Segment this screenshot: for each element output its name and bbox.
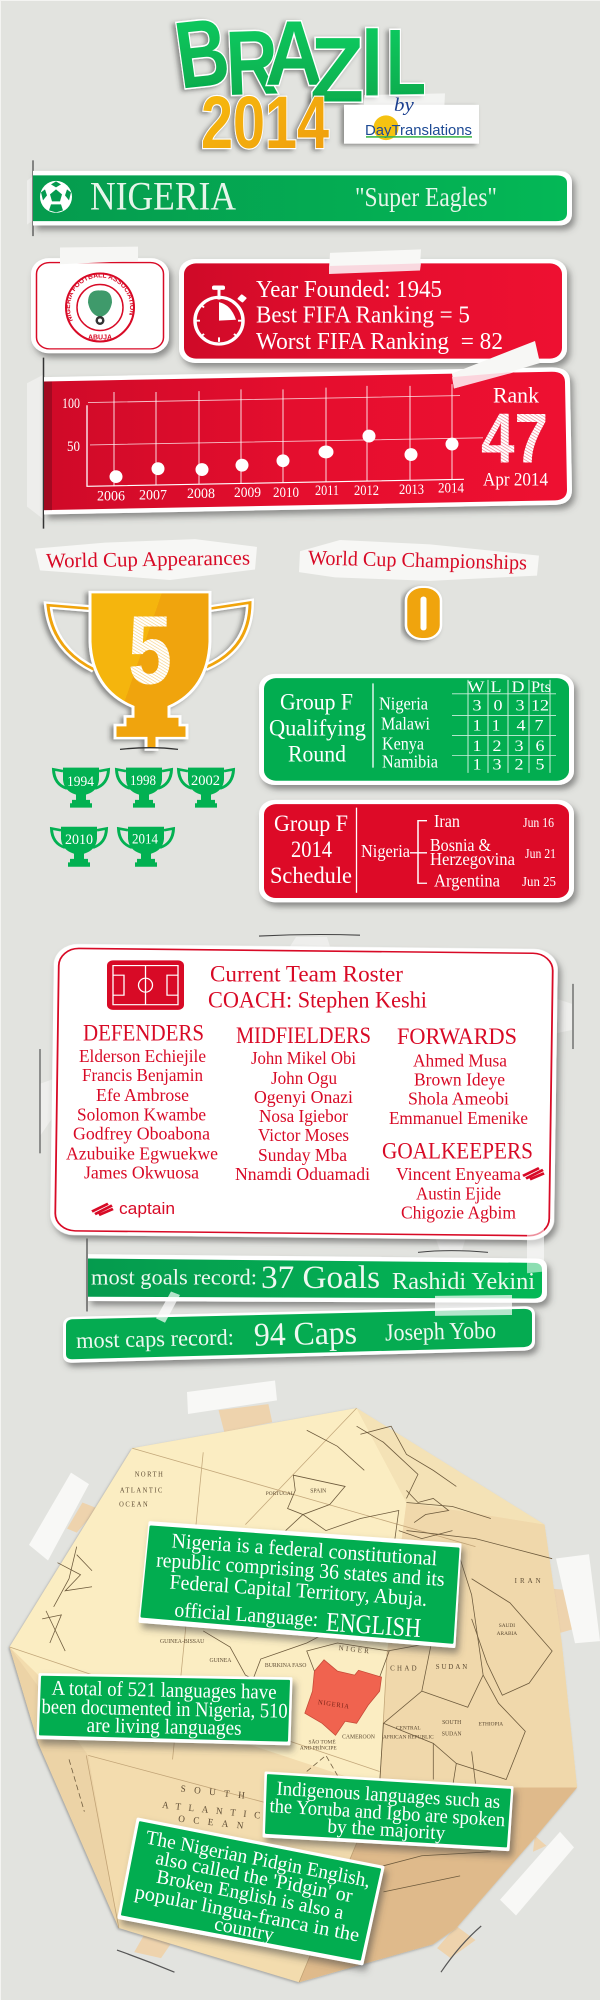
- map place labels: SUDAN: [436, 1663, 469, 1671]
- list: goalkeepers: Vincent Enyeama: [396, 1164, 521, 1185]
- chart axis labels: 100: [62, 396, 80, 412]
- icon: trophy with 5 appearances: [48, 592, 250, 749]
- table values: Pts: [531, 678, 551, 696]
- table values: 2: [514, 755, 524, 773]
- globe tabs: [67, 1404, 581, 1958]
- globe body: [10, 1408, 577, 1982]
- callout: federal republic: Nigeria is a federal constitutional: [171, 1530, 438, 1570]
- map place labels: ETHIOPIA: [478, 1721, 503, 1727]
- text: panel title: [269, 689, 366, 767]
- map place labels: ATLANTIC: [162, 1801, 268, 1822]
- text: panel title: Qualifying: [269, 715, 366, 741]
- list: forwards: FORWARDS: [397, 1023, 517, 1049]
- list: midfielders: Ogenyi Onazi: [254, 1087, 353, 1108]
- text: panel title: Group F: [274, 811, 348, 837]
- list: forwards: Ahmed Musa: [413, 1051, 507, 1071]
- callout: federal republic: Federal Capital Territory, Abuja.: [169, 1571, 428, 1611]
- table values: 3: [492, 755, 502, 773]
- fixtures: Iran: [434, 812, 461, 831]
- table values: D: [511, 678, 525, 696]
- icon: championships 0: [406, 587, 441, 639]
- text: rank 47: 47: [481, 399, 548, 477]
- text: panel title: [270, 811, 352, 889]
- text: caps record: most caps record:: [76, 1325, 234, 1354]
- text: panel title: Group F: [280, 689, 353, 715]
- list: goalkeepers: [382, 1138, 544, 1223]
- callout: indigenous languages: the Yoruba and Igbo are spoken: [269, 1796, 506, 1831]
- text: 5: 5: [128, 596, 172, 705]
- callout: 521 languages: are living languages: [86, 1715, 242, 1740]
- chart axis labels: 2011: [315, 483, 339, 499]
- heading: BRAZIL: A: [265, 1, 323, 104]
- list: defenders: Francis Benjamin: [82, 1065, 203, 1086]
- table values: 6: [535, 737, 545, 755]
- list: midfielders: Victor Moses: [258, 1125, 349, 1146]
- title: Brazil 2014: [169, 0, 426, 164]
- table values: 3: [514, 737, 524, 755]
- chart axis labels: 2008: [187, 486, 215, 502]
- logo: by DayTranslations: by: [394, 95, 414, 116]
- banner: most goals record: [87, 1238, 547, 1311]
- icon: mini trophy 2002: [178, 768, 234, 808]
- list: defenders: Godfrey Oboabona: [73, 1124, 210, 1144]
- list: midfielders: Nosa Igiebor: [259, 1106, 348, 1127]
- callout: Nigerian Pidgin English: also called the 'Pidgin' or: [154, 1848, 355, 1907]
- icon: mini trophy 1994: [54, 768, 108, 808]
- chart axis labels: 2014: [438, 480, 464, 496]
- fixtures: Nigeria: [361, 842, 411, 862]
- list: midfielders: John Mikel Obi: [251, 1048, 356, 1068]
- map place labels: NIGER: [338, 1644, 371, 1656]
- callout: indigenous languages: by the majority: [327, 1816, 446, 1845]
- callout: 521 languages: [38, 1675, 291, 1744]
- map lines: [10, 1408, 475, 1982]
- fixtures: Jun 21: [525, 847, 556, 862]
- chart axis labels: 50: [67, 439, 80, 455]
- team names: Malawi: [381, 715, 430, 734]
- heading: BRAZIL: [169, 0, 426, 121]
- fixtures: Herzegovina: [430, 850, 516, 870]
- table values: 4: [516, 716, 526, 734]
- callout: Nigerian Pidgin English: Broken English is also a: [155, 1866, 346, 1924]
- callout: Nigerian Pidgin English: popular lingua-franca in the: [133, 1882, 361, 1947]
- map place labels: GUINEA-BISSAU: [160, 1639, 205, 1645]
- text: panel title: 2014: [291, 837, 332, 863]
- text: panel title: Round: [288, 741, 346, 767]
- banner: most goals record: 37 Goals: [261, 1258, 380, 1295]
- callout: indigenous languages: [264, 1773, 512, 1850]
- chart data points: [110, 430, 458, 483]
- list: goalkeepers: GOALKEEPERS: [382, 1138, 533, 1164]
- map: paper globe: [10, 1404, 581, 1982]
- panel: Group F qualifying table: [259, 674, 574, 785]
- banner: most caps record: 94 Caps: [253, 1314, 357, 1353]
- chart axis labels: 2006: [97, 488, 125, 504]
- list: defenders: Solomon Kwambe: [77, 1105, 206, 1125]
- chart axis labels: [62, 396, 464, 504]
- callout: 521 languages: been documented in Nigeria, 510: [41, 1696, 288, 1723]
- map place labels: SUDAN: [442, 1731, 462, 1737]
- table values: 3: [515, 696, 525, 714]
- list: defenders: Elderson Echiejile: [79, 1046, 206, 1067]
- list: midfielders: John Ogu: [271, 1068, 337, 1088]
- list: defenders: James Okwuosa: [84, 1163, 199, 1183]
- icon: mini trophy 2014: 2014: [132, 831, 158, 847]
- chart axis labels: 2013: [399, 482, 424, 498]
- map place labels: CHAD: [390, 1664, 419, 1672]
- callout: federal republic: official Language:: [174, 1599, 319, 1631]
- list: defenders: Azubuike Egwuekwe: [66, 1144, 218, 1164]
- list: defenders: DEFENDERS: [83, 1020, 204, 1046]
- list: forwards: [389, 1023, 528, 1128]
- icon: football pitch: [107, 960, 184, 1010]
- map place labels: SOUTH: [180, 1784, 254, 1803]
- banner: most caps record: Joseph Yobo: [385, 1317, 496, 1346]
- map place labels: OCEAN: [119, 1501, 149, 1509]
- map place labels: [119, 1471, 544, 1833]
- banner: most goals record: Rashidi Yekini: [392, 1268, 535, 1294]
- table values: W: [468, 678, 485, 696]
- icon: mini trophy 1994: 1994: [67, 774, 94, 790]
- heading: BRAZIL: Z: [310, 18, 364, 121]
- heading: World Cup Appearances: World Cup Appearances: [46, 546, 250, 572]
- heading: World Cup Championships: World Cup Championships: [308, 546, 527, 574]
- heading: World Cup Championships: [299, 540, 539, 581]
- icon: mini trophy 2010: 2010: [65, 832, 93, 848]
- map place labels: SOUTH: [442, 1720, 462, 1726]
- table values: 3: [472, 696, 482, 714]
- bracket: [410, 821, 427, 883]
- map place labels: SPAIN: [310, 1488, 327, 1494]
- callout: Nigerian Pidgin English: country: [213, 1914, 276, 1946]
- list: goalkeepers: Chigozie Agbim: [401, 1203, 516, 1223]
- fixtures: Jun 16: [523, 816, 554, 830]
- list: forwards: Brown Ideye: [414, 1070, 505, 1090]
- table values: 1: [472, 755, 482, 773]
- legend: captain: captain: [119, 1199, 175, 1218]
- map place labels: BURKINA FASO: [265, 1663, 306, 1669]
- fixtures: Jun 25: [522, 875, 556, 890]
- logo: by DayTranslations: DayTranslations: [365, 122, 472, 139]
- callout: 521 languages: A total of 521 languages have: [51, 1677, 277, 1704]
- text: worst ranking: Worst FIFA Ranking = 82: [256, 327, 503, 354]
- map place labels: ARABIA: [497, 1631, 517, 1637]
- chart axis labels: 2009: [234, 485, 261, 501]
- map place labels: NORTH: [135, 1471, 164, 1478]
- text: year founded: Year Founded: 1945: [256, 275, 442, 303]
- fixtures: [361, 812, 556, 891]
- table values: [468, 678, 551, 773]
- list: forwards: Shola Ameobi: [408, 1089, 509, 1109]
- list: forwards: Emmanuel Emenike: [389, 1108, 528, 1128]
- heading: BRAZIL: I: [361, 7, 383, 118]
- table values: 1: [472, 716, 482, 734]
- fixtures: Argentina: [434, 872, 501, 891]
- text: Super Eagles: "Super Eagles": [355, 183, 497, 213]
- table values: 7: [534, 716, 544, 734]
- icon: Nigeria Football Association crest: ABUJA: [88, 334, 112, 341]
- text: roster heading: Current Team Roster: [210, 961, 404, 987]
- chart: rank by year: [87, 384, 483, 486]
- list: midfielders: Sunday Mba: [258, 1145, 347, 1166]
- map place labels: SAUDI: [499, 1623, 515, 1629]
- table values: 12: [531, 696, 549, 714]
- chart axis labels: 2012: [354, 483, 379, 499]
- fixtures: Bosnia &: [430, 836, 491, 856]
- map place labels: IRAN: [515, 1577, 544, 1585]
- icon: Nigeria highlighted: NIGERIA: [317, 1699, 350, 1711]
- text: roster heading: COACH: Stephen Keshi: [208, 987, 427, 1013]
- map place labels: CAMEROON: [342, 1734, 376, 1741]
- chart axis labels: 2010: [273, 485, 299, 501]
- text: NIGERIA: NIGERIA: [90, 174, 236, 219]
- team names: Kenya: [382, 735, 425, 754]
- list: midfielders: Nnamdi Oduamadi: [235, 1164, 370, 1185]
- heading: World Cup Appearances: [35, 539, 257, 580]
- list: goalkeepers: Austin Ejide: [416, 1184, 501, 1204]
- map place labels: AFRICAN REPUBLIC: [383, 1734, 434, 1741]
- map place labels: PORTUGAL: [266, 1491, 295, 1497]
- heading: 2014: 2014: [201, 81, 329, 164]
- heading: BRAZIL: L: [386, 11, 426, 115]
- table values: L: [490, 678, 502, 696]
- panel: founding and rankings: [179, 249, 567, 363]
- icon: stopwatch: [195, 285, 247, 344]
- panel: crest: [30, 246, 176, 362]
- callout: indigenous languages: Indigenous languages such as: [276, 1778, 501, 1813]
- table values: 2: [492, 737, 502, 755]
- text: Apr 2014: Apr 2014: [483, 470, 549, 490]
- list: midfielders: [235, 1023, 371, 1185]
- team names: [379, 695, 439, 772]
- icon: mini trophy 2014: [118, 827, 174, 867]
- team names: Nigeria: [379, 695, 429, 714]
- team names: Namibia: [382, 753, 439, 772]
- callout: Nigerian Pidgin English: The Nigerian Pidgin English,: [144, 1827, 372, 1892]
- table values: 0: [493, 696, 503, 714]
- text: panel title: Schedule: [270, 863, 352, 889]
- icon: mini trophy 2010: [52, 827, 106, 867]
- callout: federal republic: republic comprising 36 states and its: [155, 1549, 445, 1591]
- text: rank label: Rank: [493, 384, 539, 408]
- icon: mini trophy 2002: 2002: [191, 773, 220, 789]
- map place labels: ATLANTIC: [120, 1487, 164, 1494]
- legend: captain: [92, 1199, 175, 1218]
- callout: federal republic: ENGLISH: [325, 1606, 422, 1643]
- banner: Nigeria Super Eagles: [27, 160, 572, 236]
- table values: 5: [535, 755, 545, 773]
- table values: 1: [472, 737, 482, 755]
- map place labels: OCEAN: [178, 1814, 252, 1833]
- list: defenders: [66, 1020, 218, 1183]
- panel: FIFA rank chart: [27, 341, 572, 529]
- text: roster heading: [208, 961, 427, 1013]
- panel: team roster: [40, 935, 573, 1252]
- text: best ranking: Best FIFA Ranking = 5: [256, 301, 470, 328]
- icon: Nigeria highlighted: [305, 1660, 382, 1735]
- icon: football: [40, 181, 72, 213]
- icon: mini trophy 1998: 1998: [130, 773, 156, 789]
- callout: federal republic: [140, 1523, 460, 1646]
- chart axis labels: 2007: [139, 487, 167, 503]
- list: defenders: Efe Ambrose: [96, 1085, 189, 1106]
- text: goals record: most goals record:: [91, 1265, 257, 1290]
- icon: mini trophy 1998: [116, 768, 172, 808]
- banner: most caps record: [63, 1306, 535, 1363]
- table grid: [452, 680, 556, 773]
- icon: Nigeria Football Association crest: NIGERIA FOOTBALL ASSOCIATION: [66, 272, 133, 322]
- logo: by DayTranslations: [344, 93, 479, 144]
- panel: Group F 2014 schedule: [259, 800, 574, 902]
- map place labels: AND PRÍNCIPE: [300, 1743, 337, 1751]
- map place labels: SÃO TOMÉ: [309, 1737, 336, 1745]
- map place labels: GUINEA: [209, 1658, 232, 1664]
- list: midfielders: MIDFIELDERS: [236, 1023, 371, 1049]
- callout: Nigerian Pidgin English: [119, 1819, 383, 1964]
- table values: 1: [491, 716, 501, 734]
- heading: BRAZIL: R: [224, 10, 280, 115]
- map place labels: CENTRAL: [396, 1725, 421, 1731]
